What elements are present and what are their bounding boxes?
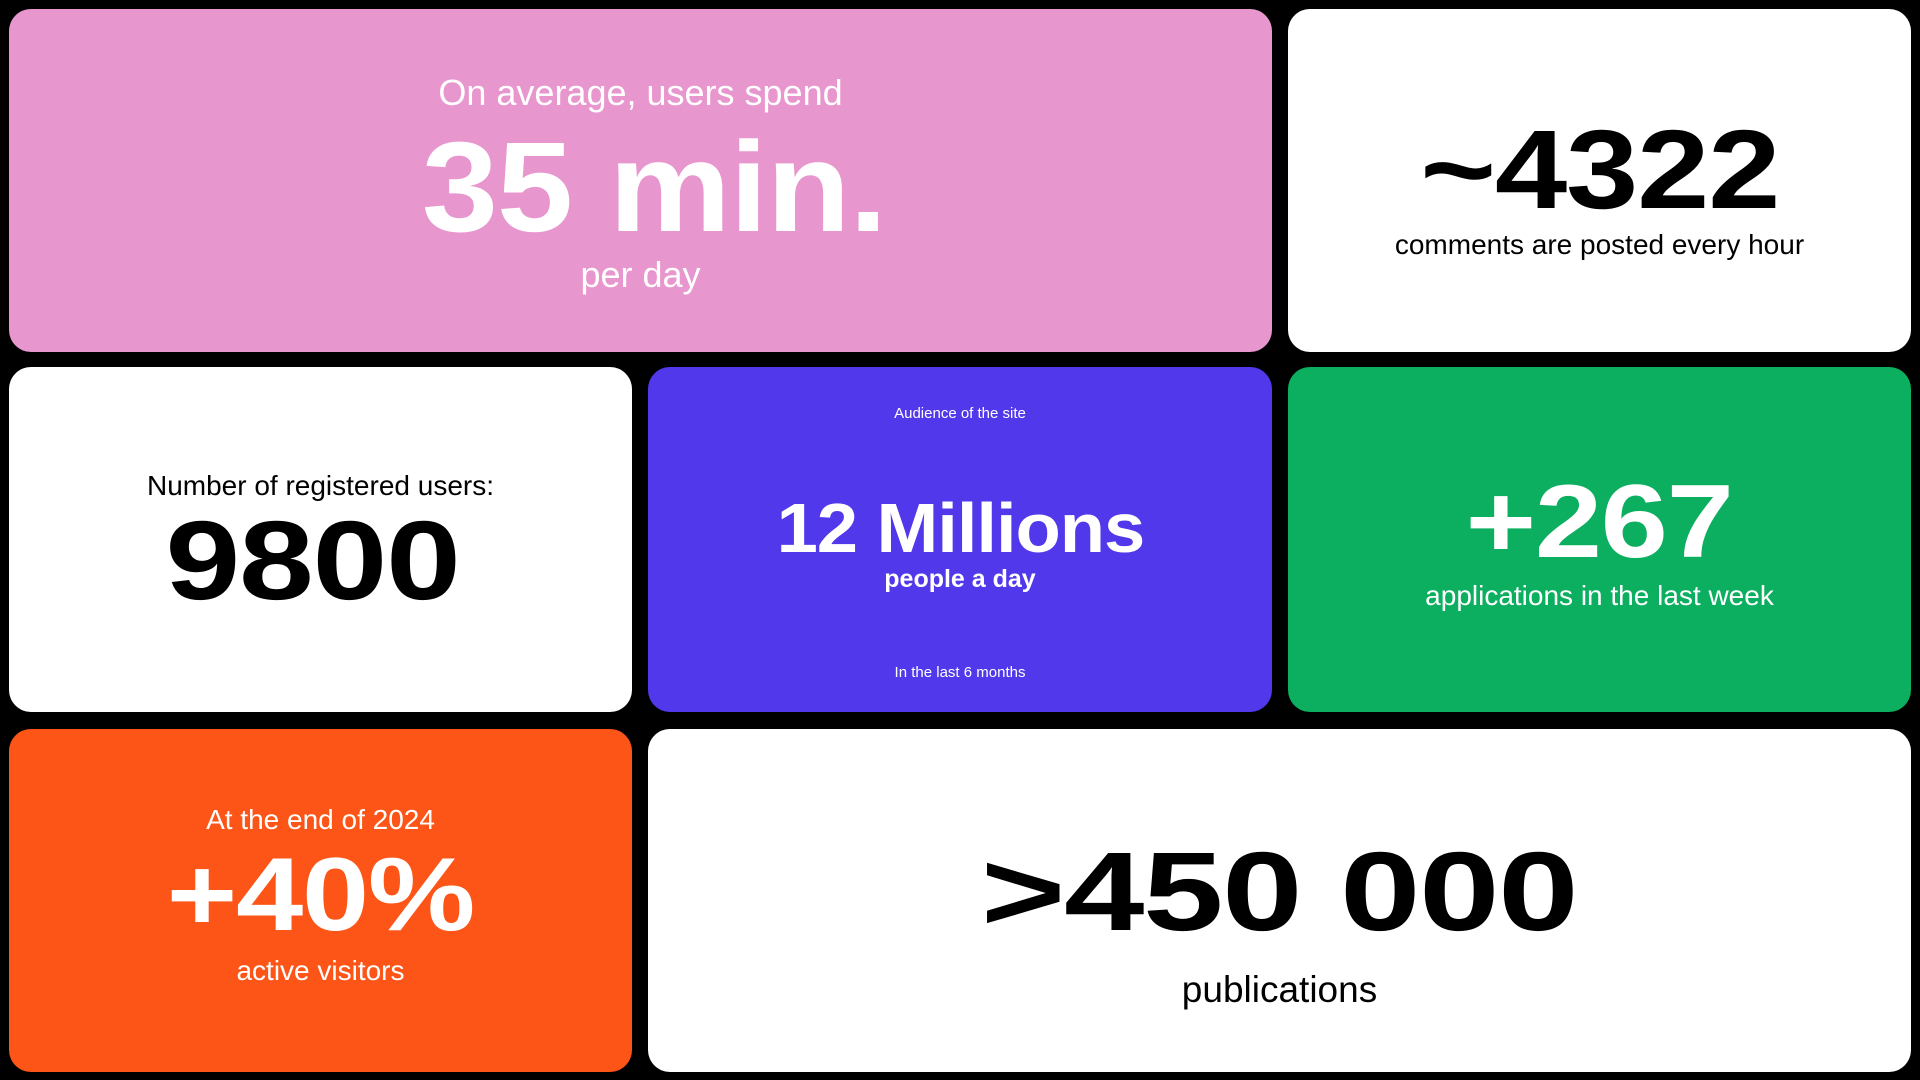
number: 12 millions: 12 Millions — [776, 489, 1144, 567]
text: label: Number of registered users: — [147, 470, 494, 501]
text: active visitors: active visitors — [236, 955, 405, 986]
panel: audience — [648, 367, 1272, 712]
panel: active visitors — [9, 729, 632, 1072]
number: 35 min: 35 min. — [422, 116, 887, 259]
text: per day: per day — [580, 254, 701, 295]
number: 450 000: >450 000 — [981, 829, 1578, 954]
text: comments caption: comments are posted every hour — [1395, 229, 1804, 260]
text: publications: publications — [1182, 969, 1377, 1010]
text: end of 2024: At the end of 2024 — [206, 804, 435, 835]
text: intro: On average, users spend — [438, 72, 843, 113]
number: 9800: 9800 — [165, 498, 460, 623]
panel: publications — [648, 729, 1911, 1072]
panel: registered users — [9, 367, 632, 712]
text: applications caption: applications in the last week — [1425, 580, 1774, 611]
text: last 6 months: In the last 6 months — [895, 664, 1025, 681]
text: people a day: people a day — [884, 565, 1036, 593]
text: audience label: Audience of the site — [894, 405, 1026, 422]
number: 267: +267 — [1466, 464, 1733, 580]
panel: time spent — [9, 9, 1272, 352]
panel: applications — [1288, 367, 1911, 712]
number: 40%: +40% — [167, 837, 474, 953]
panel: comments — [1288, 9, 1911, 352]
number: 4322: ~4322 — [1420, 107, 1779, 232]
